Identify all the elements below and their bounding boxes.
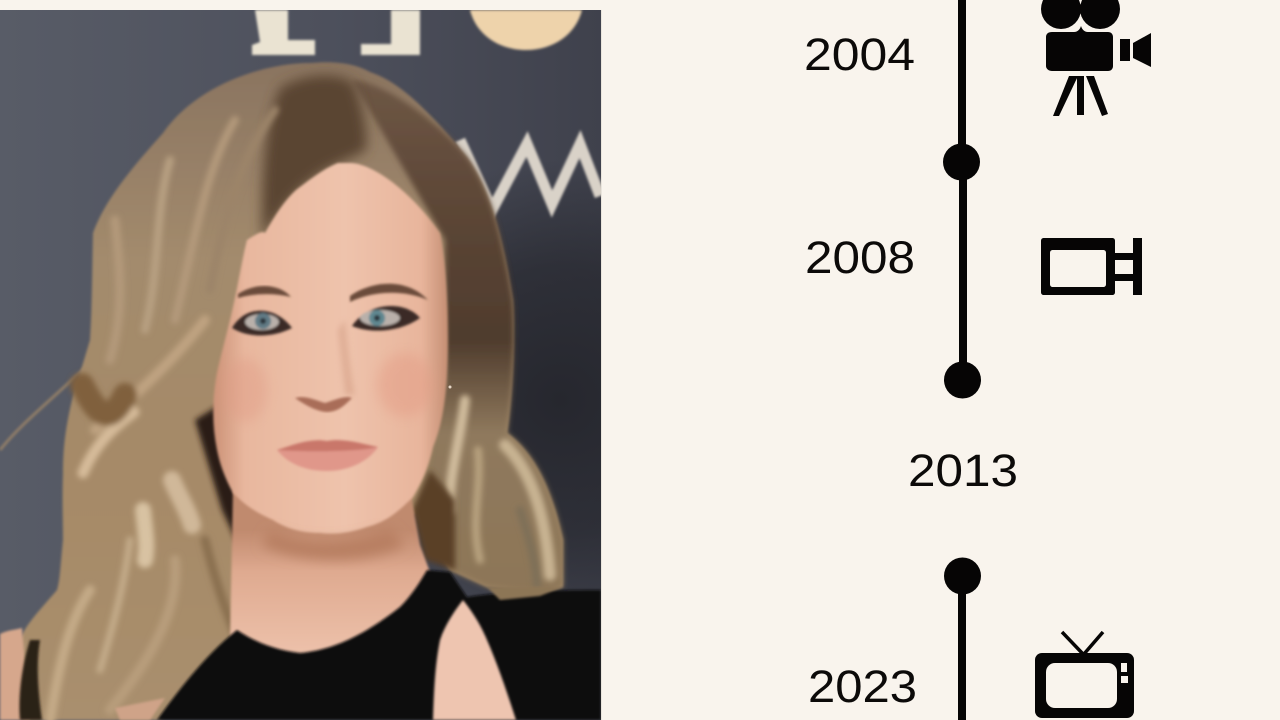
year: 2013: 2013 <box>908 445 1018 496</box>
neck and chest <box>230 490 430 665</box>
timeline nodes <box>943 144 981 594</box>
black dress <box>157 570 601 720</box>
left shoulder <box>0 628 30 720</box>
shoulder strap <box>19 640 42 720</box>
hair tips over dress <box>487 587 563 600</box>
backdrop lettering <box>252 10 600 210</box>
year: 2008: 2008 <box>805 232 915 283</box>
photo right edge <box>601 10 602 720</box>
icon: video camera outline <box>1041 238 1142 295</box>
flyaway hair wisp <box>0 368 85 450</box>
dark hair behind jaw <box>192 404 234 540</box>
face <box>213 163 448 534</box>
dress cut-out <box>433 600 516 720</box>
portrait photo <box>0 10 601 720</box>
timeline line <box>958 0 967 720</box>
hair main mass <box>19 62 563 720</box>
year: 2004: 2004 <box>804 29 915 80</box>
hair strands <box>50 110 550 720</box>
eyes <box>232 306 420 336</box>
year: 2023: 2023 <box>808 661 917 712</box>
icon: film camera <box>1041 0 1151 116</box>
nose <box>295 320 355 412</box>
earring <box>448 386 452 388</box>
hair roots shading <box>262 76 366 240</box>
cheek blush <box>378 354 426 416</box>
lips <box>277 440 378 471</box>
hair right side shading <box>352 80 563 593</box>
icon: television <box>1035 632 1134 718</box>
chin shadow <box>262 528 405 560</box>
eyebrows <box>238 286 291 298</box>
